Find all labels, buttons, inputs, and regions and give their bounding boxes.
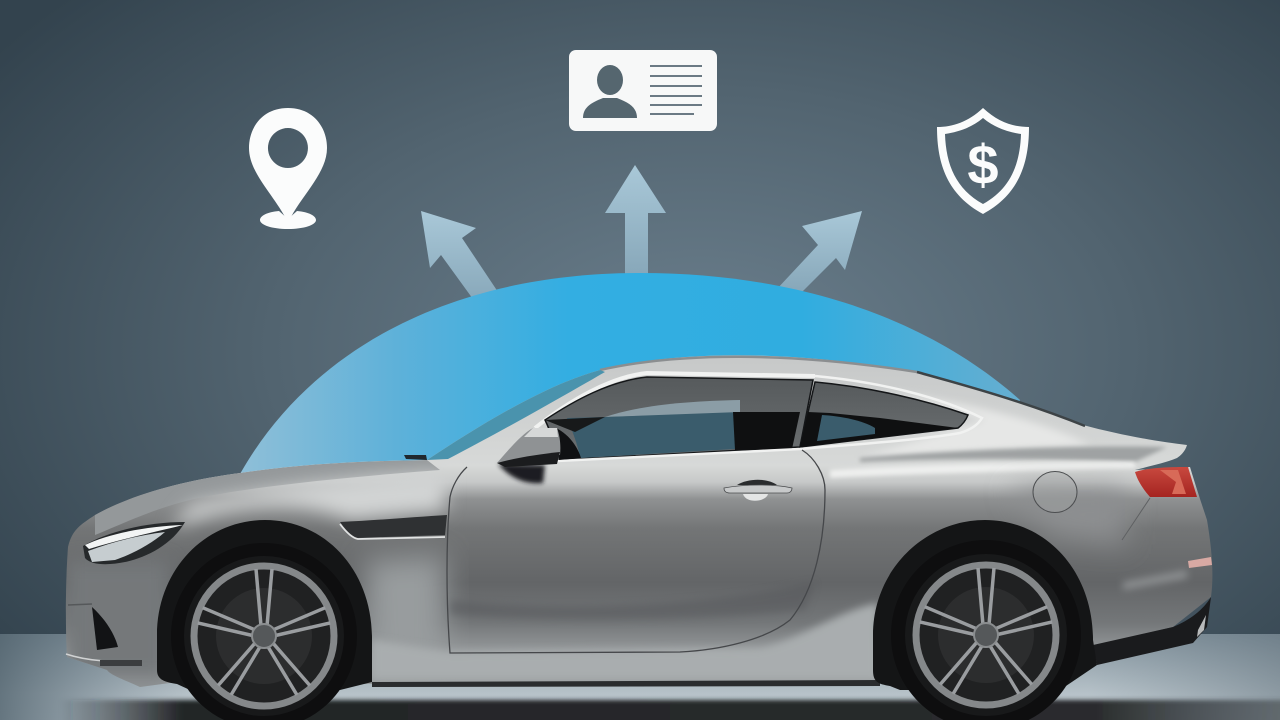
rear diffuser (1093, 597, 1211, 665)
icon: ID card (569, 50, 717, 131)
rear reflector (1188, 557, 1212, 568)
sill (372, 603, 878, 680)
arrow: centre (605, 165, 666, 280)
front wheel (171, 543, 357, 720)
front fender lower (365, 555, 445, 680)
wiper (404, 455, 427, 460)
icon: shield with dollar (937, 108, 1029, 214)
fuel cap (1033, 472, 1077, 512)
spoiler line (917, 372, 1085, 426)
rear bumper highlight (1123, 570, 1187, 590)
underbody (372, 680, 880, 687)
door window (535, 373, 815, 460)
rear quarter white line (830, 462, 1135, 478)
rear quarter lower (1010, 490, 1125, 545)
door reflection band (449, 590, 808, 620)
tail light (1122, 467, 1197, 540)
front fender highlight (170, 472, 445, 530)
icon: shield with dollar: $ (967, 133, 999, 196)
rear quarter grey band (860, 447, 1167, 462)
door handle (724, 480, 792, 501)
protective dome (240, 273, 1020, 474)
front vent (340, 515, 447, 539)
ground shadow (60, 700, 1280, 720)
front wheel arch (157, 520, 372, 690)
icon: location pin (249, 108, 327, 229)
rear wheel (891, 540, 1081, 720)
rear window (557, 376, 982, 461)
side mirror (497, 428, 581, 483)
roof rim (600, 357, 917, 372)
car (60, 355, 1280, 720)
car body (66, 355, 1212, 687)
door outline (447, 450, 825, 653)
front intake (66, 604, 142, 666)
hood band (95, 460, 440, 535)
arrow: left (421, 211, 502, 306)
body shading (66, 392, 1187, 680)
rear wheel arch (873, 520, 1097, 690)
floor (0, 634, 1280, 720)
nose shade (66, 560, 170, 680)
rear quarter highlight (882, 394, 1081, 454)
headlight (83, 522, 185, 564)
arrow: right (776, 211, 862, 294)
windshield (427, 370, 605, 460)
